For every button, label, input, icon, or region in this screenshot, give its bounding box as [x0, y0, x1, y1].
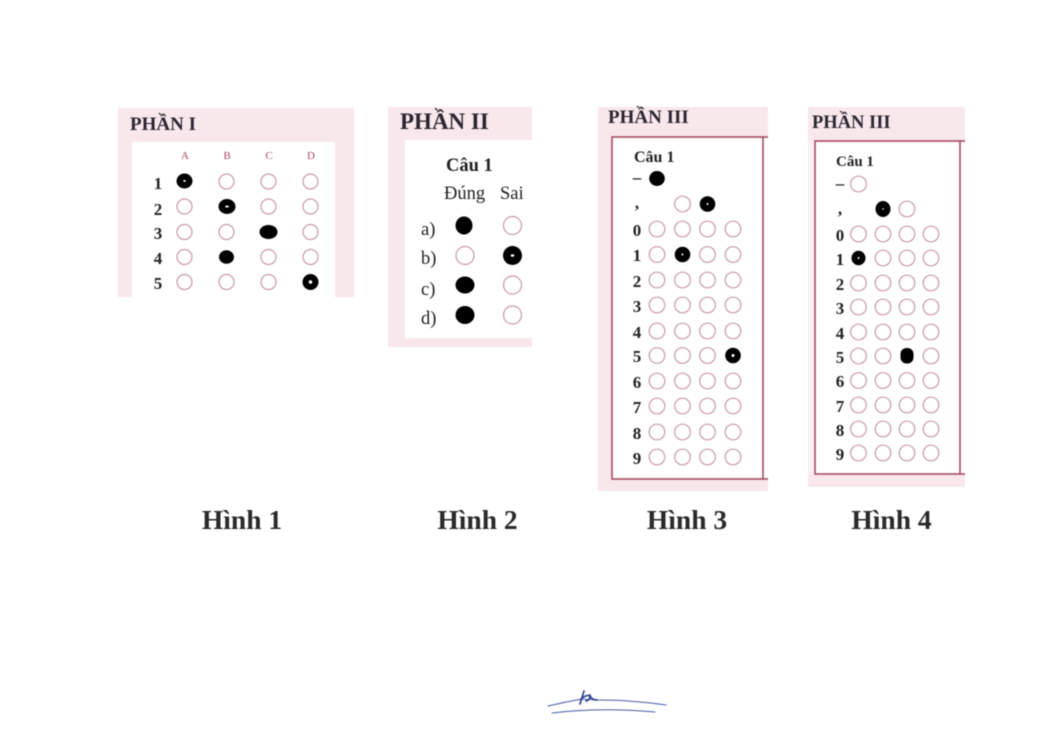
heading: Phan II: PHẦN II: [400, 108, 489, 134]
filled bubbles: [176, 174, 318, 290]
question label: Câu 1: [446, 156, 493, 176]
row labels: a): [421, 220, 435, 240]
filled bubbles: [649, 171, 741, 363]
row labels: 4: [836, 324, 845, 343]
row labels: [421, 220, 436, 329]
row labels: 1: [836, 250, 844, 269]
caption: Hinh 2: Hình 2: [437, 504, 518, 535]
row numbers: 4: [154, 249, 163, 268]
row labels: 5: [836, 348, 844, 367]
row labels: 7: [836, 397, 845, 416]
row labels: 3: [633, 297, 641, 316]
filled bubbles: [456, 216, 522, 324]
row labels: 0: [633, 221, 641, 240]
row labels: b): [421, 249, 436, 269]
row labels: ,: [838, 199, 842, 218]
row labels: 9: [836, 445, 844, 464]
row labels: 8: [633, 424, 641, 443]
icon: handwritten signature: [548, 691, 666, 713]
row labels: 9: [633, 449, 641, 468]
empty bubbles: [851, 176, 939, 461]
heading: Phan I: PHẦN I: [130, 113, 196, 135]
empty bubbles: [649, 196, 741, 465]
column letters: D: [307, 150, 315, 162]
column labels: Sai: [500, 184, 524, 204]
row labels: c): [421, 280, 435, 300]
column labels: Đúng: [444, 184, 485, 204]
row numbers: 1: [154, 174, 162, 193]
column letters: A: [181, 150, 189, 162]
row numbers: 2: [154, 200, 162, 219]
row labels: 2: [836, 275, 844, 294]
row labels: 6: [836, 372, 844, 391]
row labels: [632, 168, 642, 468]
row labels: 7: [633, 398, 642, 417]
heading: Phan III: PHẦN III: [608, 106, 689, 128]
column letters: B: [223, 150, 231, 162]
row labels: 1: [633, 246, 641, 265]
panel: Hinh 1, Phan I: [118, 108, 354, 297]
row labels: –: [835, 174, 845, 193]
panel: Hinh 3, Phan III: [598, 106, 768, 491]
column letters: [181, 150, 315, 162]
caption: Hinh 3: Hình 3: [647, 504, 727, 535]
row numbers: 5: [154, 274, 162, 293]
row labels: 6: [633, 373, 641, 392]
row labels: 0: [836, 226, 844, 245]
empty bubbles: [456, 216, 522, 324]
panel: Hinh 2, Phan II: [388, 107, 532, 347]
row labels: 8: [836, 421, 844, 440]
empty bubbles: [177, 174, 318, 290]
caption: Hinh 4: Hình 4: [851, 504, 932, 535]
row labels: ,: [635, 193, 639, 212]
column letters: C: [265, 150, 273, 162]
heading: Phan III: PHẦN III: [812, 111, 891, 133]
question label: Câu 1: [634, 149, 674, 166]
filled bubbles: [852, 201, 914, 364]
row labels: –: [632, 168, 642, 187]
row labels: 2: [633, 272, 641, 291]
row numbers: 3: [154, 224, 162, 243]
row labels: d): [421, 309, 436, 329]
column labels: [444, 184, 524, 204]
row numbers: [154, 174, 163, 293]
row labels: 3: [836, 299, 844, 318]
row labels: 4: [633, 323, 642, 342]
row labels: 5: [633, 347, 641, 366]
question label: Câu 1: [836, 154, 874, 170]
caption: Hinh 1: Hình 1: [202, 504, 282, 535]
row labels: [835, 174, 845, 464]
panel: Hinh 4, Phan III: [808, 107, 965, 487]
